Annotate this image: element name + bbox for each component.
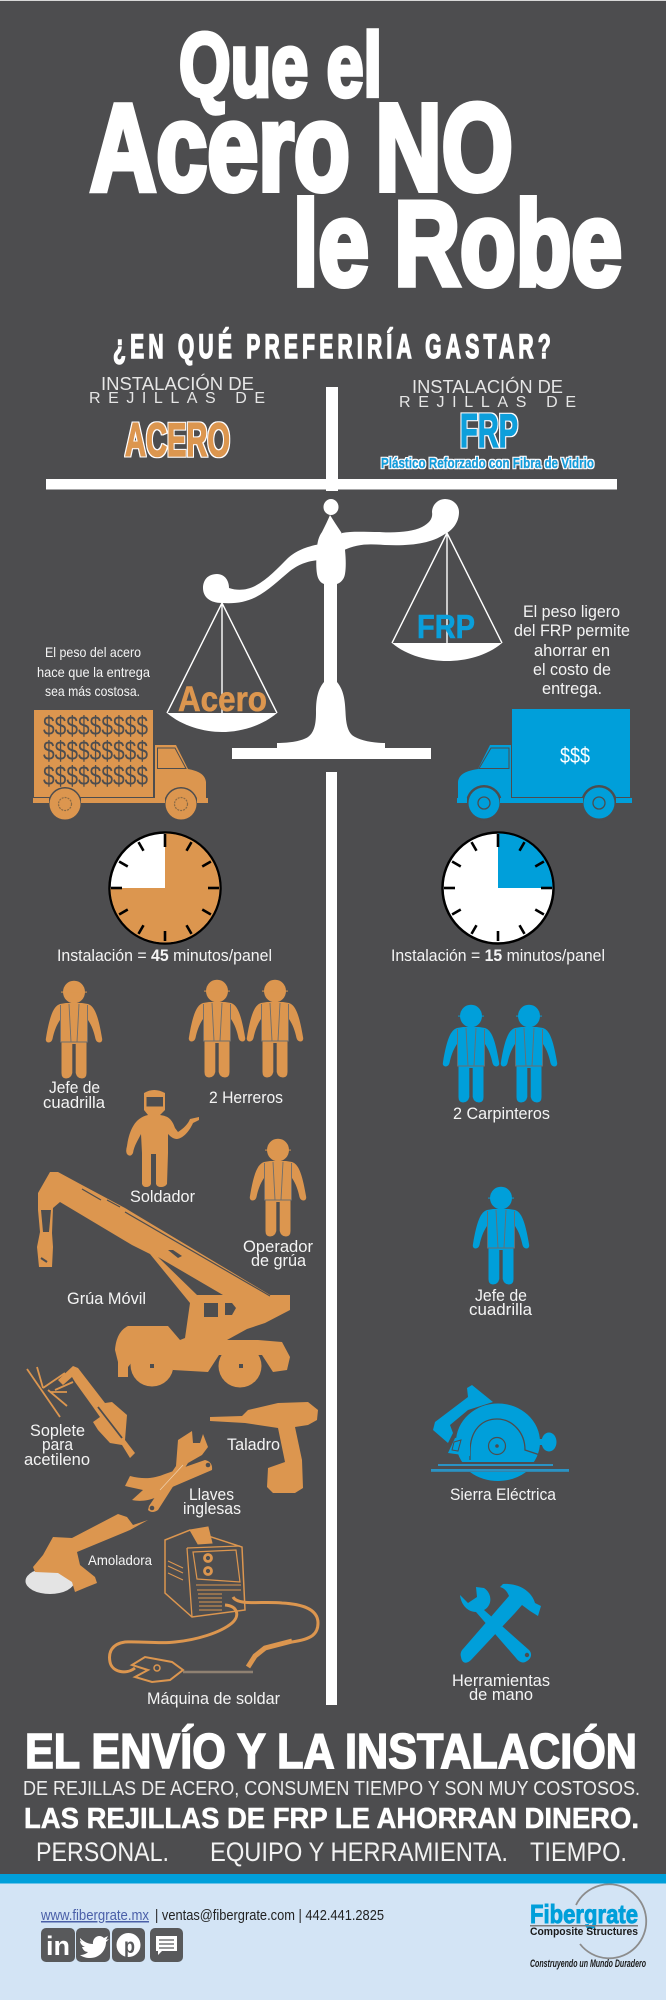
icon: mobile crane <box>37 1172 290 1388</box>
icon: crew chief FRP <box>473 1187 529 1284</box>
text: grinder: Amoladora <box>88 1552 152 1568</box>
heading: steel installation <box>89 373 265 466</box>
text: wrenches <box>183 1485 241 1518</box>
icon: pinterest <box>112 1928 145 1962</box>
icon: clock 15 minutes <box>442 832 554 944</box>
text: saw: Sierra Eléctrica <box>450 1485 556 1504</box>
text: welder: Soldador <box>130 1187 195 1206</box>
icon: wrenches <box>125 1431 212 1512</box>
text: steel weight: sea más costosa. <box>45 683 140 699</box>
text: crane operator <box>243 1237 313 1270</box>
heading: steel installation: ACERO <box>125 413 230 466</box>
text: FRP weight: del FRP permite <box>514 621 630 640</box>
icon: linkedin <box>41 1928 75 1962</box>
conclusion text <box>23 1724 640 1867</box>
text: FRP weight: ahorrar en <box>534 641 610 660</box>
icon: clock 45 minutes <box>110 832 220 944</box>
text: crew chief <box>43 1078 106 1112</box>
conclusion text: LAS REJILLAS DE FRP LE AHORRAN DINERO. <box>24 1803 639 1835</box>
text: steel weight <box>37 644 150 699</box>
text: steel weight: El peso del acero <box>45 644 141 660</box>
icon: two carpenters <box>443 1005 557 1102</box>
text: FRP weight: el costo de <box>533 660 611 679</box>
icon: welding machine <box>110 1527 318 1682</box>
logo: Fibergrate: Fibergrate <box>530 1899 638 1929</box>
text: crew chief FRP <box>469 1286 533 1319</box>
heading: FRP installation: Plástico Reforzado con Fibra de Vidrio <box>381 455 594 472</box>
heading: steel installation: REJILLAS DE <box>89 390 265 407</box>
conclusion text: EQUIPO Y HERRAMIENTA. <box>210 1837 508 1867</box>
contact line <box>40 1907 384 1924</box>
contact line: | ventas@fibergrate.com | 442.441.2825 <box>155 1907 384 1924</box>
pan label: FRP: FRP <box>417 608 475 645</box>
heading: FRP installation: REJILLAS DE <box>399 394 576 411</box>
text: crew chief: cuadrilla <box>43 1093 106 1112</box>
heading: FRP installation: FRP <box>460 404 518 457</box>
text: crew chief FRP: cuadrilla <box>469 1300 533 1319</box>
logo: Fibergrate <box>530 1884 646 1970</box>
text: torch: para <box>42 1435 73 1454</box>
footer panel <box>0 1874 666 2000</box>
text: crane operator: Operador <box>243 1237 313 1256</box>
icon: two blacksmiths <box>189 980 303 1078</box>
logo: Fibergrate: Composite Structures <box>530 1926 638 1938</box>
text: mobile crane: Grúa Móvil <box>67 1289 146 1308</box>
text: welding machine: Máquina de soldar <box>147 1689 280 1708</box>
text: hand tools: de mano <box>469 1685 533 1704</box>
icon: crew chief steel <box>46 981 102 1078</box>
icon: steel truck <box>33 710 208 821</box>
icon: pinterest: p <box>124 1935 135 1958</box>
text: torch: acetileno <box>24 1450 90 1469</box>
text: wrenches: inglesas <box>183 1499 241 1518</box>
icon: angle grinder <box>26 1514 148 1594</box>
text: steel weight: hace que la entrega <box>37 664 150 680</box>
icon: steel truck: $$$$$$$$$ <box>43 711 148 741</box>
icon: acetylene torch <box>27 1366 135 1458</box>
title: Que el <box>179 16 382 116</box>
text: install time steel: Instalación = 45 minutos/panel <box>57 946 272 965</box>
title: Acero NO <box>90 80 513 217</box>
icon: linkedin: in <box>46 1931 70 1961</box>
icon: steel truck: $$$$$$$$$ <box>43 736 148 766</box>
icon: FRP truck: $$$ <box>560 743 590 768</box>
conclusion text: TIEMPO. <box>530 1837 627 1867</box>
contact line: www.fibergrate.mx <box>40 1907 149 1924</box>
icon: chat <box>150 1928 183 1962</box>
heading: steel installation: INSTALACIÓN DE <box>101 373 254 394</box>
text: carpenters: 2 Carpinteros <box>453 1104 550 1123</box>
text: wrenches: Llaves <box>189 1485 234 1504</box>
text: hand tools <box>452 1671 550 1704</box>
text: crew chief: Jefe de <box>49 1078 100 1097</box>
text: install time FRP: Instalación = 15 minutos/panel <box>391 946 605 965</box>
divider post and bar <box>46 387 617 1705</box>
text: blacksmiths: 2 Herreros <box>209 1088 283 1107</box>
icon: welder <box>126 1090 199 1187</box>
title <box>90 16 622 311</box>
social icons <box>41 1928 183 1962</box>
subtitle question: ¿EN QUÉ PREFERIRÍA GASTAR? <box>113 327 551 365</box>
text: drill: Taladro <box>227 1435 280 1454</box>
text: FRP weight: entrega. <box>542 679 602 698</box>
pan strings <box>167 533 502 714</box>
text: crew chief FRP: Jefe de <box>475 1286 527 1305</box>
icon: drill <box>210 1402 318 1493</box>
text: hand tools: Herramientas <box>452 1671 550 1690</box>
heading: FRP installation: INSTALACIÓN DE <box>412 376 563 397</box>
balance scale <box>167 499 502 759</box>
icon: hand tools <box>460 1584 541 1663</box>
text: FRP weight: El peso ligero <box>523 602 620 621</box>
icon: steel truck: $$$$$$$$$ <box>43 761 148 791</box>
icon: twitter <box>76 1928 110 1962</box>
text: crane operator: de grúa <box>251 1251 307 1270</box>
text: FRP weight <box>514 602 630 698</box>
text: torch: Soplete <box>30 1421 85 1440</box>
icon: FRP truck <box>457 709 632 821</box>
text: torch <box>24 1421 90 1469</box>
pan label: Acero: Acero <box>178 680 267 719</box>
heading: FRP installation <box>381 376 594 472</box>
icon: circular saw <box>431 1385 569 1481</box>
icon: crane operator <box>250 1139 306 1236</box>
conclusion text: PERSONAL. <box>36 1837 169 1867</box>
